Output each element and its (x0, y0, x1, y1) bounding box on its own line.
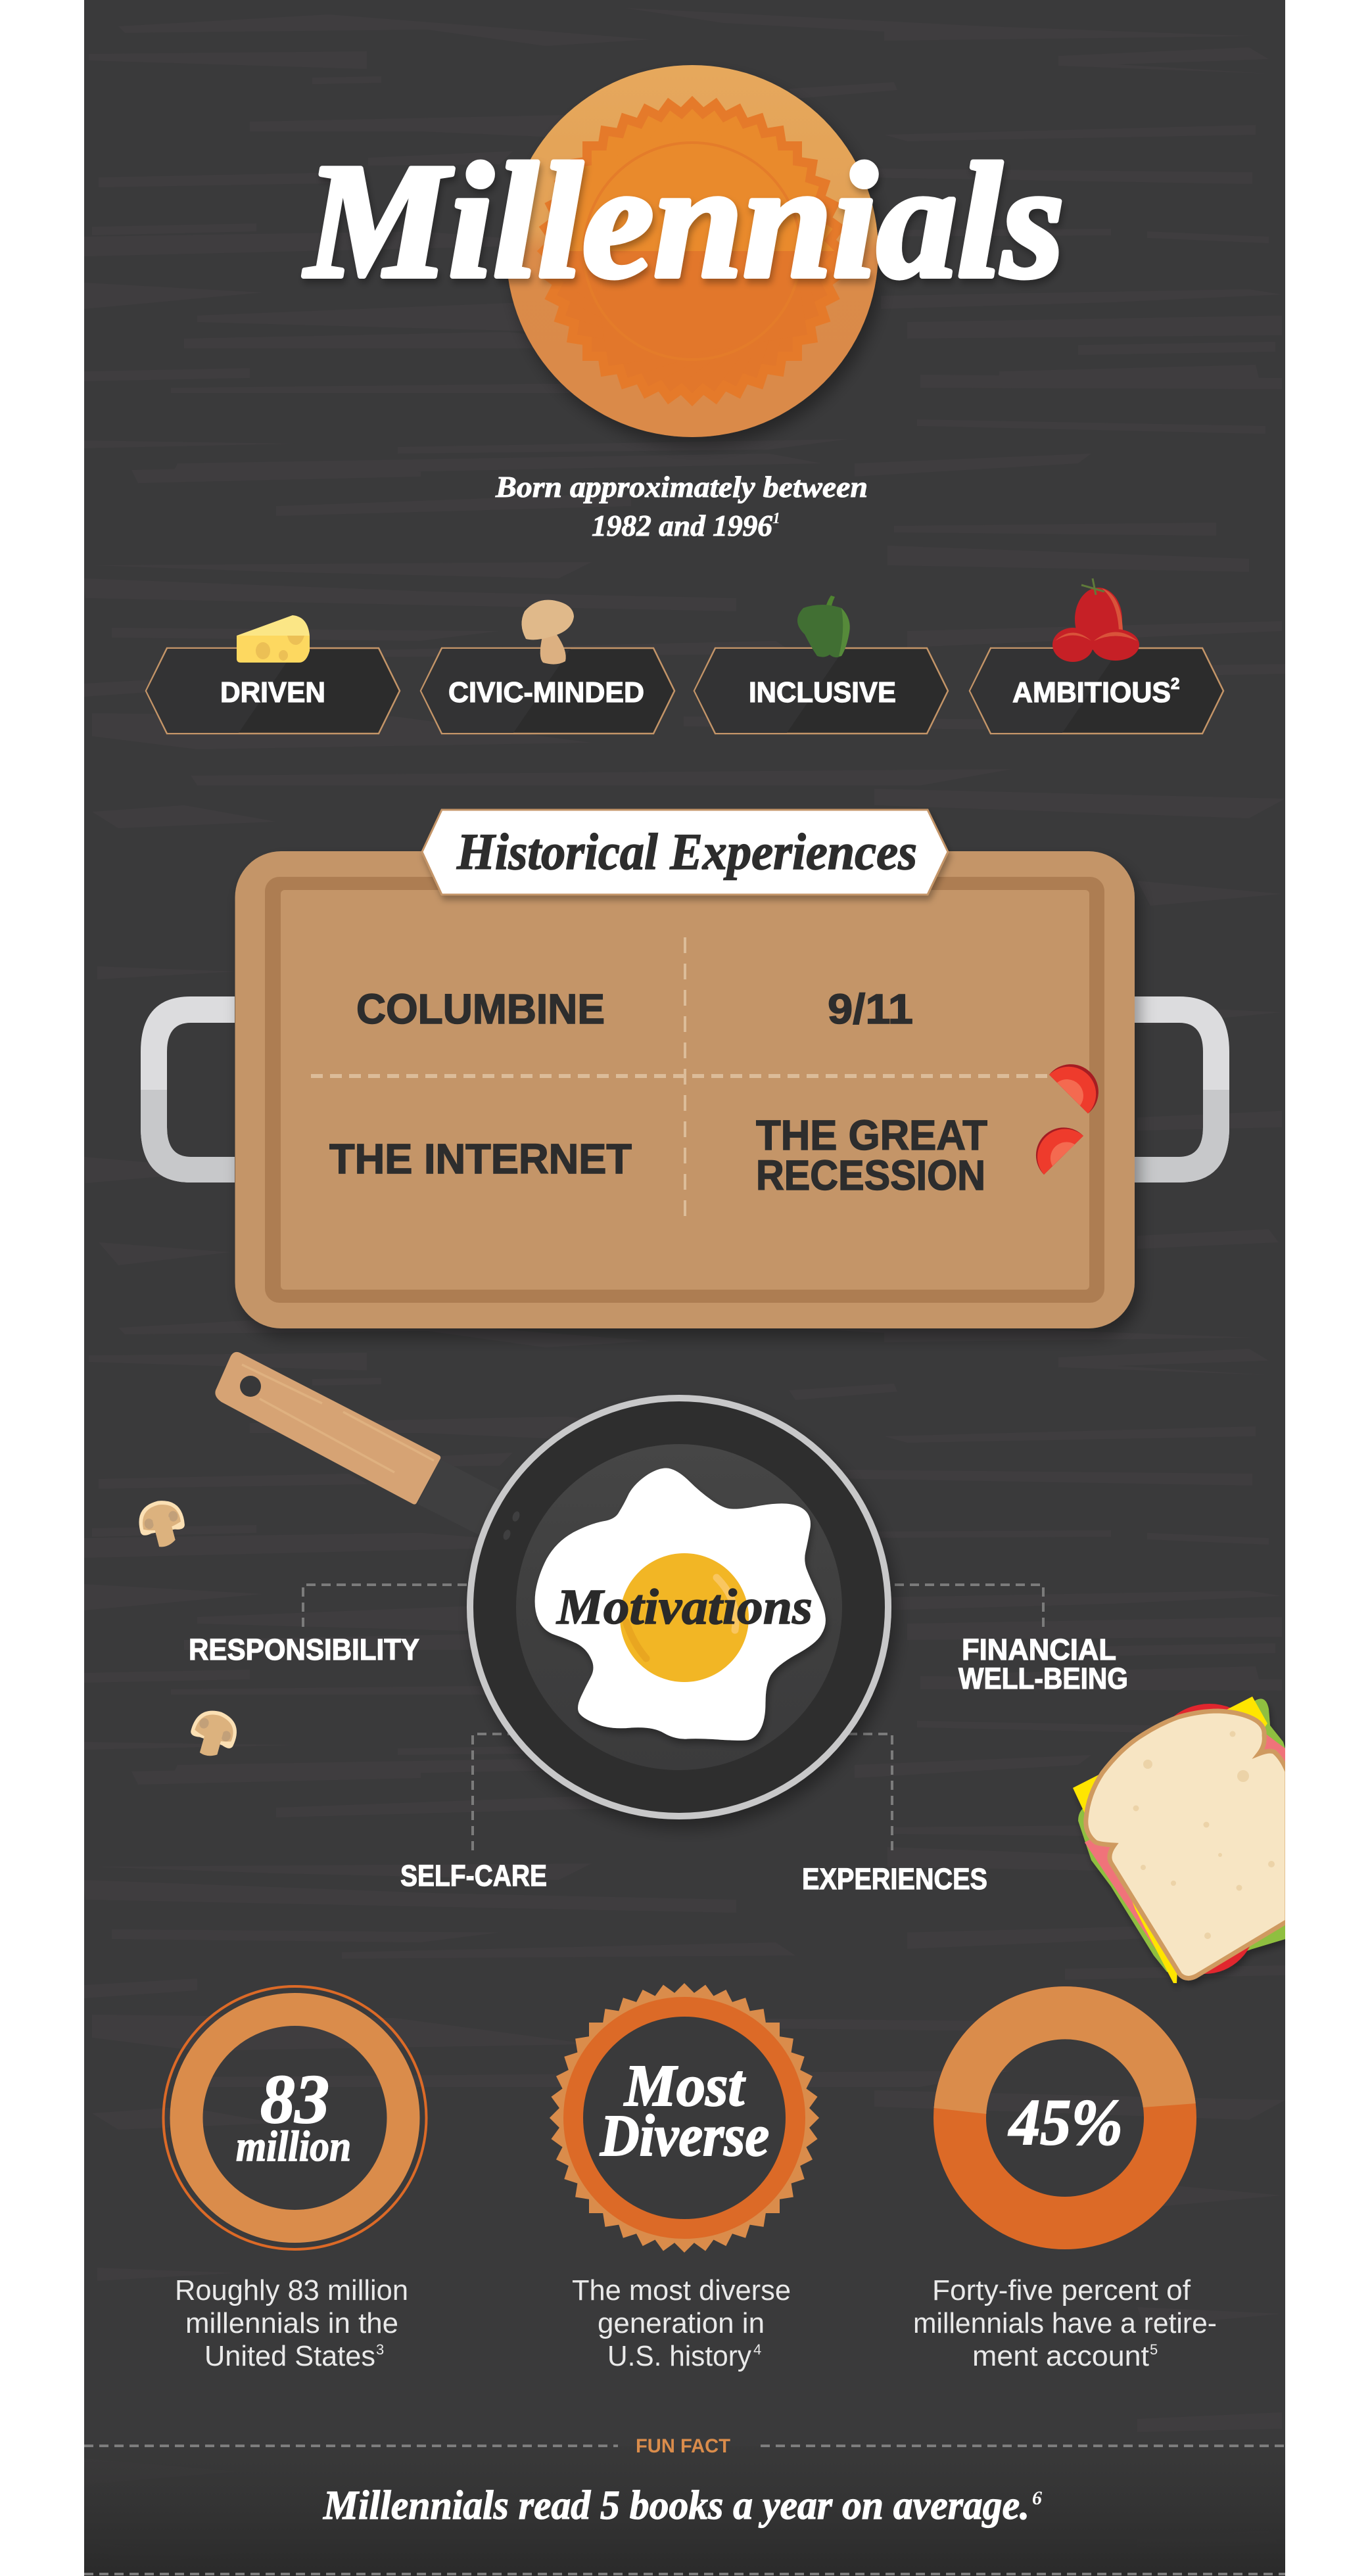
label: self-care: SELF-CARE (400, 1859, 547, 1892)
quadrant: the great recession (756, 1112, 987, 1199)
label: responsibility: RESPONSIBILITY (189, 1633, 419, 1666)
label: INCLUSIVE (749, 676, 896, 709)
icon: sandwich (1073, 1697, 1287, 1983)
banner: historical experiences (422, 810, 948, 895)
cheese (1073, 1697, 1267, 1983)
caption: most diverse: U.S. history (607, 2340, 751, 2372)
pie filling upper (569, 109, 834, 251)
subtitle: Born approximately between (495, 470, 868, 503)
trait: civic-minded (421, 600, 674, 734)
fun fact label: FUN FACT (636, 2435, 730, 2457)
label: DRIVEN (220, 676, 325, 709)
trait: ambitious (970, 578, 1223, 734)
yolk highlight (717, 1578, 736, 1630)
plate disc (506, 65, 878, 437)
pan stem (417, 1459, 500, 1535)
pan body (470, 1398, 888, 1816)
icon: mushroom (521, 600, 574, 665)
caption: 45 percent: ment account (972, 2340, 1149, 2372)
donut full (960, 2013, 1170, 2223)
caption: most diverse: The most diverse (572, 2274, 791, 2307)
dashed dividers (311, 937, 1049, 1225)
frying pan (215, 1352, 888, 1816)
caption: most diverse: generation in (598, 2307, 765, 2339)
value: 45% (1008, 2086, 1123, 2159)
caption: most diverse (572, 2274, 791, 2372)
quadrant: the great recession: THE GREAT (756, 1112, 987, 1159)
number: 83 (260, 2061, 329, 2138)
caption: 45 percent: millennials have a retire- (913, 2307, 1217, 2339)
board (235, 851, 1135, 1328)
unit: million (236, 2122, 351, 2170)
heading: Diverse (600, 2103, 769, 2168)
icon: mushroom (135, 1497, 188, 1550)
ring (163, 1986, 426, 2249)
quadrant: 9/11: 9/11 (828, 985, 913, 1033)
caption: 83 million: 3 (376, 2341, 384, 2358)
heading: Most (623, 2053, 746, 2119)
lettuce patch (1252, 1939, 1285, 1949)
caption: 83 million: millennials in the (185, 2307, 398, 2339)
caption: 83 million (175, 2274, 408, 2372)
handle right (1135, 996, 1229, 1183)
egg yolk (620, 1553, 749, 1682)
tomato (1173, 1704, 1231, 1717)
quadrant: the internet: THE INTERNET (329, 1135, 632, 1183)
hexagon (421, 648, 674, 734)
label: financial well-being: WELL-BEING (958, 1662, 1128, 1695)
bread (1086, 1711, 1287, 1979)
quadrant: the great recession: RECESSION (756, 1152, 985, 1199)
icon: green pepper (797, 596, 850, 657)
pie ring (584, 143, 801, 360)
lettuce (1078, 1698, 1285, 1979)
subtitle: 1982 and 1996 (592, 509, 772, 542)
pie filling lower (550, 109, 834, 393)
icon: cheese (237, 615, 310, 663)
trait: driven (146, 615, 400, 734)
caption: 83 million: United States (204, 2340, 375, 2372)
ham (1085, 1839, 1156, 1949)
bread specks (1133, 1731, 1275, 1939)
pan interior (516, 1444, 842, 1770)
banner: historical experiences: Historical Experiences (456, 823, 917, 880)
label: experiences: EXPERIENCES (802, 1862, 987, 1896)
title: Millennials (303, 130, 1064, 312)
yolk shade (626, 1622, 646, 1658)
hero plate (506, 65, 878, 437)
caption: 45 percent (913, 2274, 1217, 2372)
caption: 83 million: Roughly 83 million (175, 2274, 408, 2307)
heading (600, 2053, 769, 2168)
ring (573, 2007, 795, 2229)
hexagon (970, 648, 1223, 734)
subtitle (495, 470, 868, 542)
caption: 45 percent: Forty-five percent of (932, 2274, 1191, 2307)
donut segment (934, 1986, 1196, 2114)
wood handle (215, 1352, 440, 1505)
label: financial well-being (958, 1633, 1128, 1695)
caption: most diverse: 4 (753, 2341, 761, 2358)
trait: inclusive (694, 596, 948, 734)
fun fact sentence: 6 (1032, 2487, 1042, 2509)
caption: 45 percent: 5 (1150, 2341, 1158, 2358)
hexagon (694, 648, 948, 734)
board groove (265, 877, 1104, 1303)
icon: tomato slice (1036, 1127, 1083, 1175)
fun fact divider (84, 2446, 1285, 2574)
hexagon (146, 648, 400, 734)
icon: mushroom (185, 1704, 243, 1763)
label: financial well-being: FINANCIAL (962, 1633, 1116, 1666)
subtitle: 1 (772, 510, 780, 527)
panel: cutting board (141, 810, 1229, 1328)
trait: ambitious: 2 (1171, 675, 1179, 693)
starburst (550, 1983, 819, 2253)
fun fact sentence: Millennials read 5 books a year on average. (323, 2483, 1029, 2528)
icon: tomato slice (1049, 1064, 1098, 1113)
label: CIVIC-MINDED (448, 676, 644, 709)
label: AMBITIOUS (1012, 676, 1171, 709)
quadrant: columbine: COLUMBINE (356, 985, 605, 1033)
egg white (536, 1469, 824, 1739)
pie crust (537, 96, 847, 406)
handle left (141, 996, 235, 1183)
stat: 83 million (163, 1986, 426, 2249)
stat: 45 percent donut (934, 1986, 1196, 2223)
icon: tomatoes (1052, 578, 1139, 662)
motivations title: Motivations (556, 1580, 813, 1635)
connectors (303, 1585, 1043, 1850)
pan highlights (502, 1510, 521, 1541)
stat: most diverse (550, 1983, 819, 2253)
